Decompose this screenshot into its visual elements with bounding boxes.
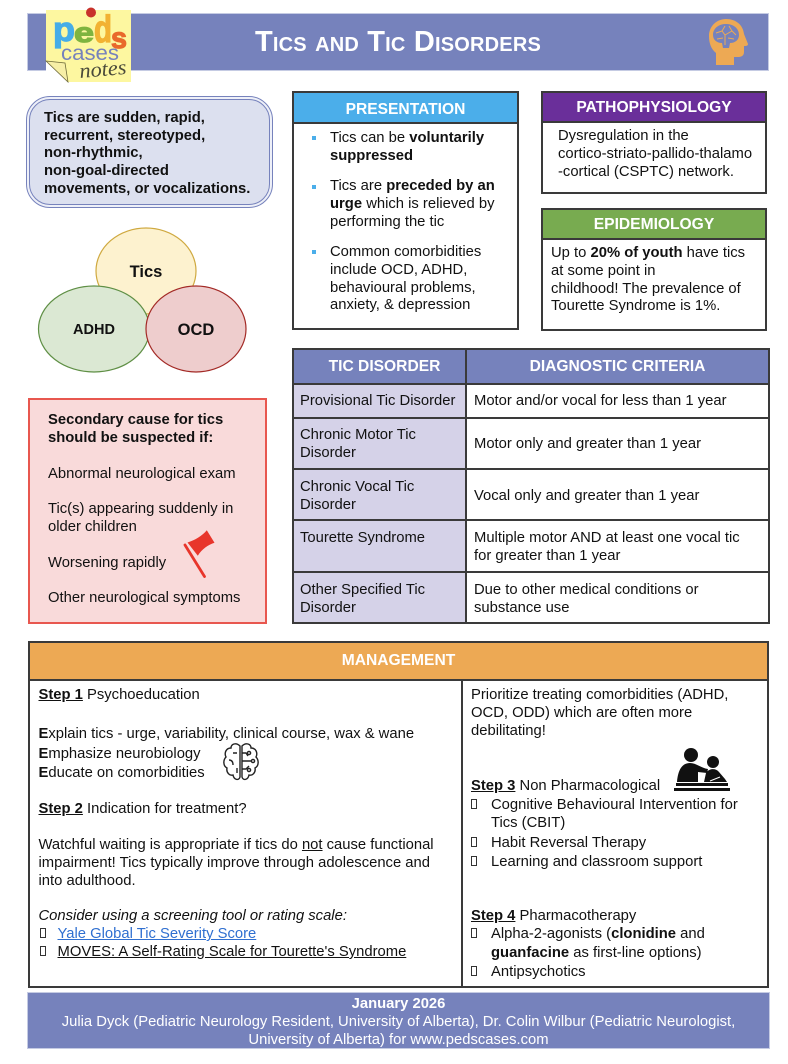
left column: steps 1 and 2: Step 1 Psychoeducation bbox=[38, 687, 200, 703]
definition text: Tics are sudden, rapid, bbox=[44, 110, 205, 126]
presentation bullets: anxiety, & depression bbox=[330, 297, 470, 313]
row: chronic vocal tic disorder bbox=[292, 470, 770, 519]
icon: PedsCases notes logo: s bbox=[111, 22, 127, 55]
OCD circle bbox=[146, 286, 246, 372]
table header bbox=[292, 348, 770, 383]
presentation bullets: Common comorbidities bbox=[330, 244, 481, 260]
row: chronic motor tic disorder bbox=[292, 419, 770, 468]
right column: steps 3 and 4 bbox=[471, 687, 738, 980]
panel: epidemiology bbox=[541, 208, 767, 331]
red flags list: Other neurological symptoms bbox=[48, 590, 240, 606]
epidemiology heading: EPIDEMIOLOGY bbox=[594, 216, 714, 233]
ADHD circle: ADHD bbox=[73, 322, 115, 338]
pathophysiology heading: PATHOPHYSIOLOGY bbox=[576, 99, 732, 116]
row: chronic motor tic disorder: Chronic Motor Tic bbox=[300, 427, 416, 443]
presentation bullets: urge which is relieved by bbox=[330, 196, 494, 212]
icon: red flag bbox=[184, 530, 214, 578]
definition text: movements, or vocalizations. bbox=[44, 181, 250, 197]
epidemiology text: childhood! The prevalence of bbox=[551, 281, 741, 297]
presentation bullets: performing the tic bbox=[330, 214, 444, 230]
presentation heading bbox=[292, 91, 519, 124]
icon: adult teaching child bbox=[674, 748, 730, 791]
left column: steps 1 and 2: Consider using a screening tool or rating scale: bbox=[38, 908, 347, 924]
presentation bullets bbox=[312, 130, 495, 313]
epidemiology text bbox=[551, 245, 745, 314]
pathophysiology text bbox=[558, 128, 752, 180]
icon: PedsCases notes logo: notes bbox=[78, 55, 127, 83]
row: other specified tic disorder bbox=[292, 573, 770, 624]
right column: steps 3 and 4: Prioritize treating comorbidities (ADHD, bbox=[471, 687, 728, 703]
right column: steps 3 and 4: Habit Reversal Therapy bbox=[491, 835, 646, 851]
red flags list: Worsening rapidly bbox=[48, 555, 166, 571]
left column: steps 1 and 2: Emphasize neurobiology bbox=[38, 746, 201, 762]
row: provisional tic disorder bbox=[292, 385, 770, 417]
left column: steps 1 and 2 bbox=[38, 687, 434, 960]
pathophysiology text: cortico-striato-pallido-thalamo bbox=[558, 146, 752, 162]
row: provisional tic disorder: Motor and/or vocal for less than 1 year bbox=[474, 393, 726, 409]
title: Tics and Tic Disorders bbox=[255, 26, 541, 58]
row: chronic vocal tic disorder: Chronic Vocal Tic bbox=[300, 479, 414, 495]
right column: steps 3 and 4: Antipsychotics bbox=[491, 964, 586, 980]
pathophysiology text: Dysregulation in the bbox=[558, 128, 689, 144]
right column: steps 3 and 4: Tics (CBIT) bbox=[491, 815, 565, 831]
footer bbox=[28, 993, 769, 1048]
OCD circle: OCD bbox=[178, 321, 214, 339]
presentation bullets: suppressed bbox=[330, 148, 413, 164]
table header: DIAGNOSTIC CRITERIA bbox=[530, 358, 705, 375]
epidemiology text: Up to 20% of youth have tics bbox=[551, 245, 745, 261]
red flags heading: should be suspected if: bbox=[48, 430, 213, 446]
left column: steps 1 and 2: MOVES: A Self-Rating Scale for Tourette's Syndrome bbox=[58, 944, 406, 960]
footer authors: Julia Dyck (Pediatric Neurology Resident, University of Alberta), Dr. Colin Wilbur (Pediatric Neurologist, bbox=[62, 1014, 735, 1030]
icon: PedsCases notes logo: e bbox=[74, 17, 94, 48]
row: other specified tic disorder: substance use bbox=[474, 600, 569, 616]
right column: steps 3 and 4: Cognitive Behavioural Intervention for bbox=[491, 797, 738, 813]
panel: tic definition bbox=[26, 96, 273, 208]
row: tourette syndrome: Tourette Syndrome bbox=[300, 530, 425, 546]
footer authors: University of Alberta) for www.pedscases.com bbox=[248, 1032, 549, 1048]
right column: steps 3 and 4: OCD, ODD) which are often more bbox=[471, 705, 692, 721]
epidemiology text: Tourette Syndrome is 1%. bbox=[551, 298, 720, 314]
left column: steps 1 and 2: into adulthood. bbox=[38, 873, 136, 889]
right column: steps 3 and 4: Alpha-2-agonists (clonidine and bbox=[491, 926, 705, 942]
right column: steps 3 and 4: Step 4 Pharmacotherapy bbox=[471, 908, 636, 924]
row: provisional tic disorder: Provisional Tic Disorder bbox=[300, 393, 455, 409]
table: tic disorder diagnostic criteria bbox=[292, 348, 770, 624]
left column: steps 1 and 2: Step 2 Indication for treatment? bbox=[38, 801, 247, 817]
left column: steps 1 and 2: Explain tics - urge, variability, clinical course, wax & wane bbox=[38, 726, 414, 742]
row: chronic motor tic disorder: Motor only and greater than 1 year bbox=[474, 436, 701, 452]
left column: steps 1 and 2: impairment! Tics typically improve through adolescence and bbox=[38, 855, 430, 871]
left column: steps 1 and 2: Educate on comorbidities bbox=[38, 765, 205, 781]
panel: secondary cause red flags bbox=[28, 398, 267, 624]
row: tourette syndrome: Multiple motor AND at least one vocal tic bbox=[474, 530, 740, 546]
management heading bbox=[30, 643, 767, 681]
right column: steps 3 and 4: guanfacine as first-line options) bbox=[491, 945, 702, 961]
red flags list bbox=[48, 466, 240, 606]
red flags list: Tic(s) appearing suddenly in bbox=[48, 501, 233, 517]
pathophysiology heading bbox=[541, 91, 767, 123]
row: tourette syndrome: for greater than 1 year bbox=[474, 548, 620, 564]
definition text: non-goal-directed bbox=[44, 163, 169, 179]
presentation bullets: Tics are preceded by an bbox=[330, 178, 495, 194]
definition text: recurrent, stereotyped, bbox=[44, 128, 205, 144]
epidemiology heading bbox=[541, 208, 767, 240]
panel: management bbox=[28, 641, 769, 988]
row: chronic vocal tic disorder: Vocal only and greater than 1 year bbox=[474, 488, 699, 504]
row: other specified tic disorder: Other Specified Tic bbox=[300, 582, 425, 598]
red flags list: older children bbox=[48, 519, 137, 535]
ADHD circle bbox=[38, 286, 150, 372]
Tics circle bbox=[96, 228, 196, 314]
icon: PedsCases notes logo bbox=[46, 10, 131, 82]
presentation bullets: Tics can be voluntarily bbox=[330, 130, 484, 146]
epidemiology text: at some point in bbox=[551, 263, 655, 279]
icon: brain outline bbox=[223, 743, 259, 780]
red flags heading bbox=[48, 412, 223, 446]
Tics circle: Tics bbox=[130, 263, 162, 281]
red flags list: Abnormal neurological exam bbox=[48, 466, 236, 482]
row: chronic motor tic disorder: Disorder bbox=[300, 445, 356, 461]
row: tourette syndrome bbox=[292, 521, 770, 571]
footer date: January 2026 bbox=[352, 996, 445, 1012]
red flags heading: Secondary cause for tics bbox=[48, 412, 223, 428]
footer authors bbox=[62, 1014, 735, 1048]
row: chronic vocal tic disorder: Disorder bbox=[300, 497, 356, 513]
right column: steps 3 and 4: Learning and classroom support bbox=[491, 854, 702, 870]
right column: steps 3 and 4: debilitating! bbox=[471, 723, 546, 739]
right column: steps 3 and 4: Step 3 Non Pharmacological bbox=[471, 778, 660, 794]
icon: PedsCases notes logo: d bbox=[94, 9, 112, 51]
row: other specified tic disorder: Disorder bbox=[300, 600, 356, 616]
definition text bbox=[44, 110, 250, 197]
icon: PedsCases notes logo: cases bbox=[61, 42, 119, 65]
presentation bullets: behavioural problems, bbox=[330, 280, 476, 296]
left column: steps 1 and 2: Yale Global Tic Severity Score bbox=[58, 926, 256, 942]
row: other specified tic disorder: Due to other medical conditions or bbox=[474, 582, 699, 598]
management heading: MANAGEMENT bbox=[342, 652, 455, 669]
definition text: non-rhythmic, bbox=[44, 145, 143, 161]
panel: presentation bbox=[292, 91, 519, 330]
left column: steps 1 and 2: Watchful waiting is appropriate if tics do not cause functional bbox=[38, 837, 434, 853]
title banner bbox=[28, 14, 768, 70]
chart: comorbidity Venn diagram bbox=[38, 227, 247, 373]
pathophysiology text: -cortical (CSPTC) network. bbox=[558, 164, 734, 180]
icon: PedsCases notes logo: p bbox=[53, 11, 75, 49]
panel: pathophysiology bbox=[541, 91, 767, 194]
presentation heading: PRESENTATION bbox=[346, 101, 465, 118]
icon: head with brain bbox=[709, 19, 748, 65]
presentation bullets: include OCD, ADHD, bbox=[330, 262, 467, 278]
table header: TIC DISORDER bbox=[329, 358, 440, 375]
